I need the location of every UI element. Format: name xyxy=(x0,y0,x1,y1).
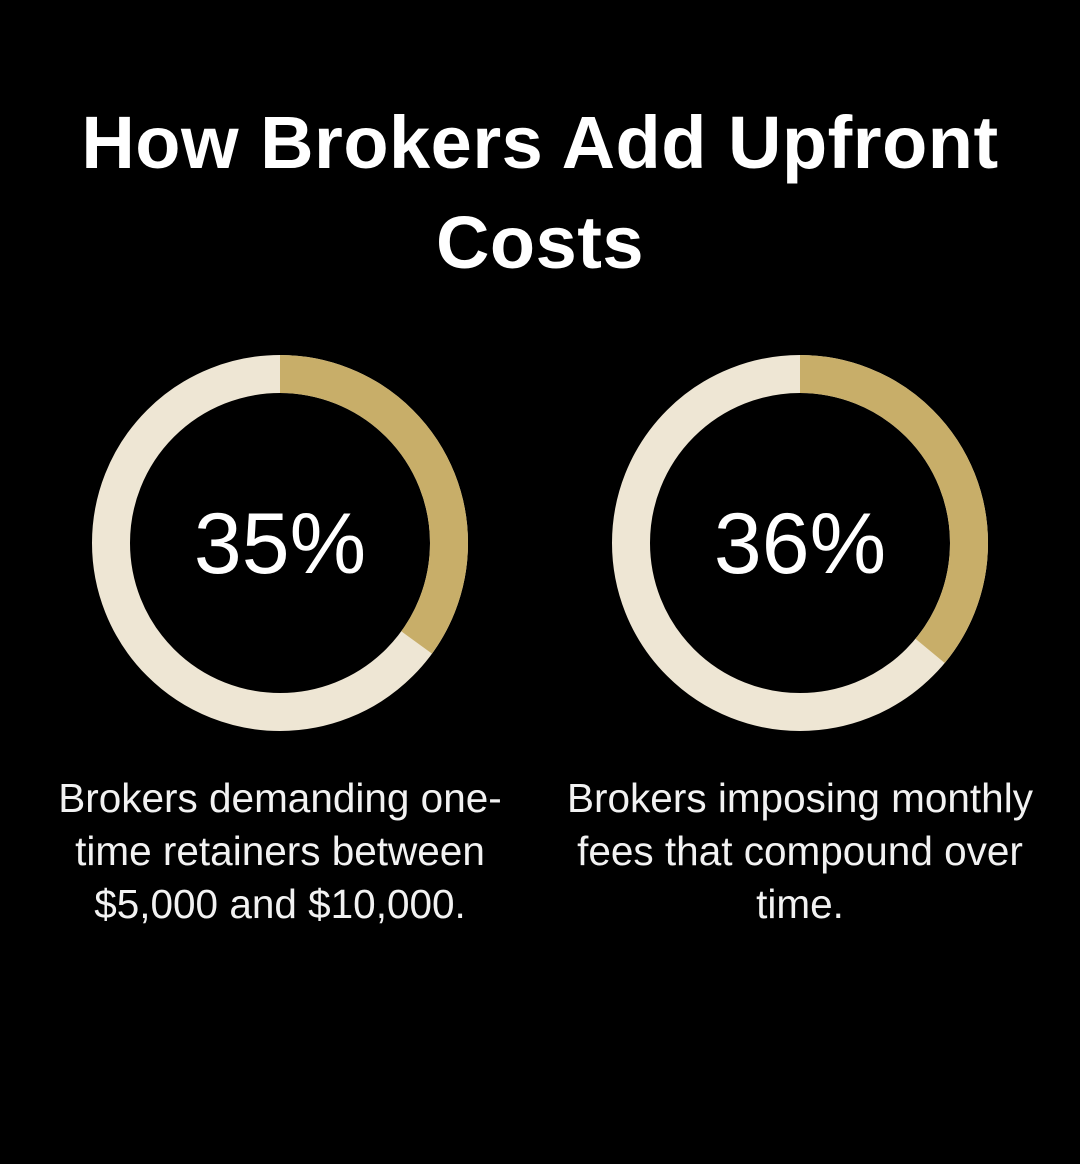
caption: monthly fees: Brokers imposing monthly xyxy=(567,775,1033,821)
title xyxy=(81,101,999,284)
donut chart: 36%: 36% xyxy=(714,496,886,592)
donut chart: 35% xyxy=(92,355,468,731)
donut chart: 36% xyxy=(612,355,988,731)
caption: retainers: Brokers demanding one- xyxy=(58,775,502,821)
donut chart: 35%: 35% xyxy=(194,496,366,592)
caption: retainers: time retainers between xyxy=(75,828,485,874)
caption: monthly fees: fees that compound over xyxy=(577,828,1023,874)
title: How Brokers Add Upfront xyxy=(81,101,999,184)
caption: retainers: $5,000 and $10,000. xyxy=(94,881,466,927)
caption: monthly fees: time. xyxy=(756,881,844,927)
title: Costs xyxy=(436,201,644,284)
caption: monthly fees xyxy=(567,775,1033,927)
caption: retainers xyxy=(58,775,502,927)
